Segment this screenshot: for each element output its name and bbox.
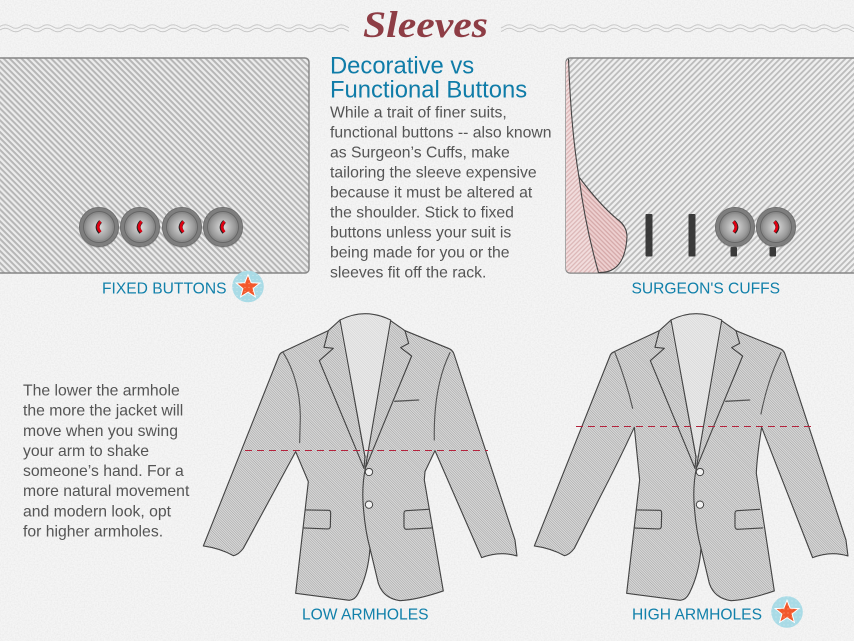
- text block: armhole description: for higher armholes.: [23, 524, 163, 540]
- cuff opening flap: [579, 177, 627, 273]
- jacket: low armholes: [203, 313, 517, 601]
- icon: star badge fixed buttons: [232, 271, 264, 302]
- button stems: [730, 247, 776, 256]
- heading: decorative vs functional: Functional Buttons: [330, 76, 527, 104]
- icon: functional buttons: [715, 207, 796, 248]
- label: low armholes: LOW ARMHOLES: [302, 606, 429, 624]
- text block: armhole description: move when you swing: [23, 423, 178, 440]
- text block: armhole description: your arm to shake: [23, 443, 149, 460]
- text block: functional buttons description: because it must be altered at: [330, 184, 533, 202]
- text block: functional buttons description: the shoulder. Stick to fixed: [330, 204, 514, 222]
- panel: fixed buttons: [0, 58, 309, 273]
- text block: armhole description: more natural movement: [23, 483, 190, 500]
- text block: armhole description: the more the jacket will: [23, 403, 183, 420]
- text block: functional buttons description: as Surgeon’s Cuffs, make: [330, 144, 510, 162]
- sleeve lining: [566, 59, 598, 272]
- text block: functional buttons description: functional buttons -- also known: [330, 124, 552, 142]
- text block: functional buttons description: buttons unless your suit is: [330, 224, 511, 242]
- jacket: high armholes: [534, 313, 848, 601]
- label: high armholes: HIGH ARMHOLES: [632, 606, 762, 624]
- heading: decorative vs functional: Decorative vs: [330, 52, 474, 80]
- panel: surgeon's cuffs: [566, 58, 854, 273]
- text block: functional buttons description: While a trait of finer suits,: [330, 104, 507, 122]
- title: Sleeves: [363, 5, 488, 46]
- buttonholes: [646, 214, 696, 256]
- icon: four fixed buttons: [79, 207, 243, 248]
- text block: functional buttons description: sleeves fit off the rack.: [330, 264, 486, 282]
- icon: star badge high armholes: [771, 596, 803, 628]
- label: surgeon's cuffs: SURGEON'S CUFFS: [632, 280, 780, 298]
- text block: functional buttons description: being made for you or the: [330, 244, 510, 262]
- text block: armhole description: The lower the armhole: [23, 382, 180, 400]
- text block: armhole description: and modern look, opt: [23, 503, 172, 520]
- low armhole dashed line: [245, 450, 488, 452]
- text block: armhole description: someone’s hand. For a: [23, 463, 184, 480]
- high armhole dashed line: [576, 426, 816, 428]
- text block: functional buttons description: tailoring the sleeve expensive: [330, 164, 537, 182]
- label: fixed buttons: FIXED BUTTONS: [102, 280, 226, 298]
